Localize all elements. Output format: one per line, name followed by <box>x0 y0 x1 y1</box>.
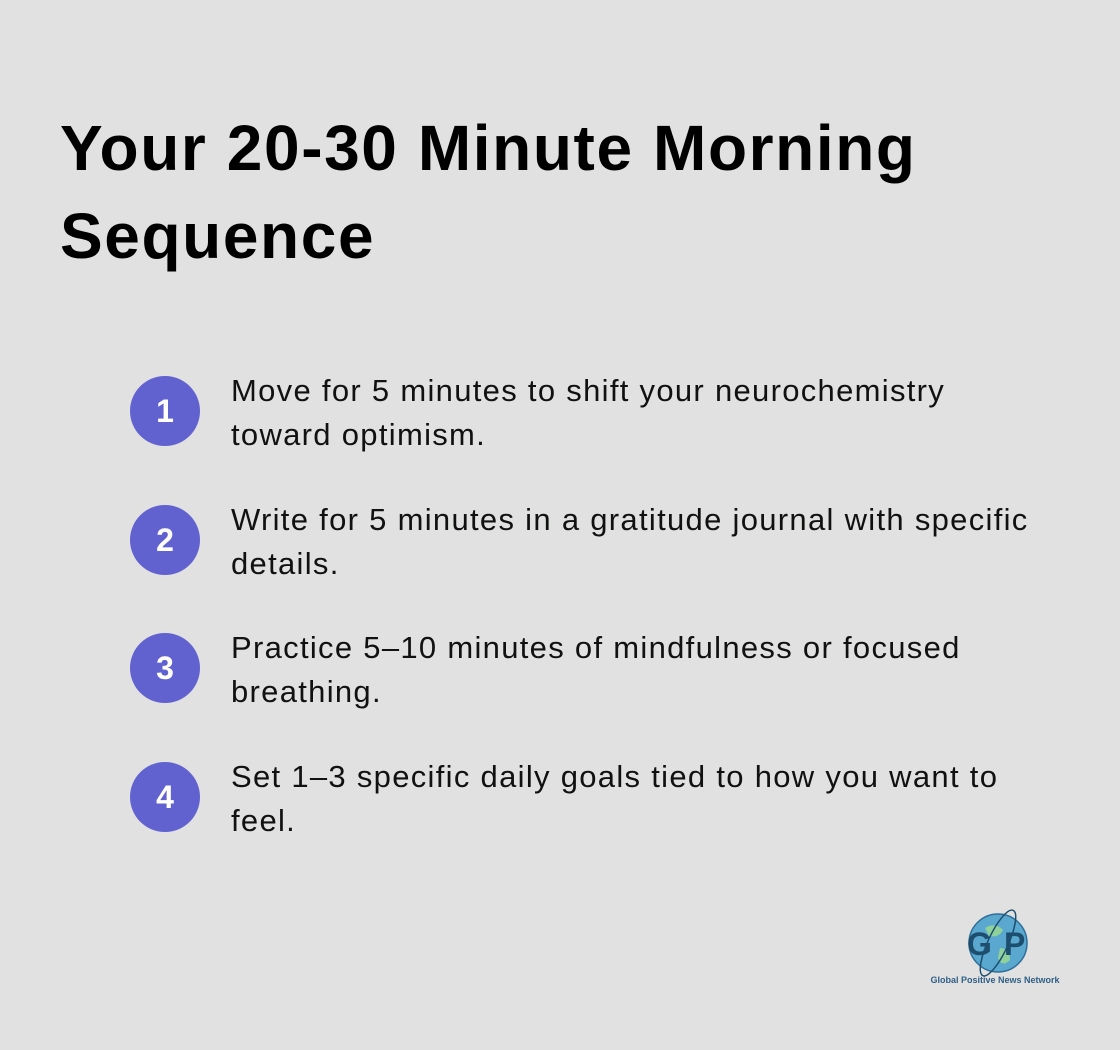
badge 1 <box>130 376 200 446</box>
text 4 <box>231 759 998 838</box>
logo: Global Positive News Network <box>930 975 1061 985</box>
text 1: Move for 5 minutes to shift your neurochemistry <box>231 373 945 408</box>
text 2 <box>231 502 1029 581</box>
title: Your 20-30 Minute Morning <box>60 112 917 184</box>
text 1: toward optimism. <box>231 417 486 452</box>
text 3: breathing. <box>231 674 382 709</box>
badge 2 <box>130 505 200 575</box>
badge 3: 3 <box>156 650 174 686</box>
badge 1: 1 <box>156 393 174 429</box>
logo <box>930 909 1061 985</box>
step 2 <box>130 502 1029 581</box>
step 1 <box>130 373 945 452</box>
step 3 <box>130 630 961 709</box>
text 3: Practice 5–10 minutes of mindfulness or focused <box>231 630 961 665</box>
text 4: feel. <box>231 803 296 838</box>
title <box>60 112 917 272</box>
badge 4: 4 <box>156 779 174 815</box>
text 1 <box>231 373 945 452</box>
text 4: Set 1–3 specific daily goals tied to how you want to <box>231 759 998 794</box>
title: Sequence <box>60 200 375 272</box>
text 2: details. <box>231 546 340 581</box>
logo: P <box>1004 926 1025 962</box>
text 2: Write for 5 minutes in a gratitude journal with specific <box>231 502 1029 537</box>
step 4 <box>130 759 998 838</box>
badge 4 <box>130 762 200 832</box>
logo: G <box>967 926 992 962</box>
badge 3 <box>130 633 200 703</box>
badge 2: 2 <box>156 522 174 558</box>
text 3 <box>231 630 961 709</box>
